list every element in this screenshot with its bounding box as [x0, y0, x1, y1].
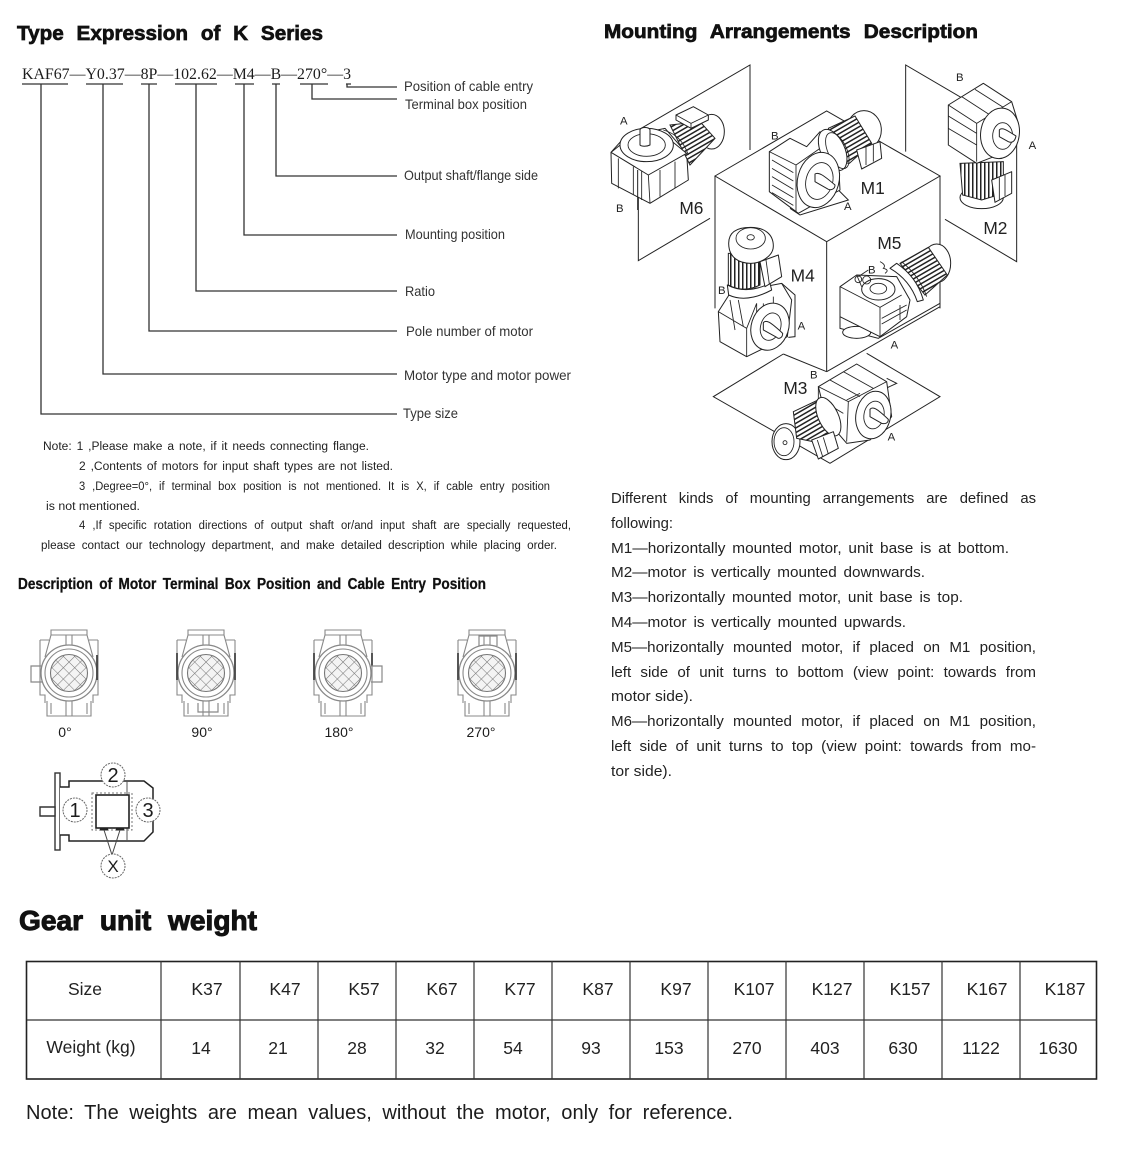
- diagram labels: A: [620, 116, 628, 128]
- table: gear unit weight: [26, 961, 1097, 1079]
- icon: terminal box 180 degrees: [314, 630, 382, 740]
- icon: terminal box 180 degrees: 180°: [325, 724, 353, 740]
- diagram labels: B: [718, 285, 726, 297]
- diagram labels: A: [1029, 140, 1037, 152]
- table weight row: 403: [810, 1038, 840, 1058]
- table header row: K37: [191, 979, 223, 999]
- table header row: K57: [348, 979, 380, 999]
- cable entry position diagram: 2: [107, 765, 119, 787]
- leader labels: Type size: [403, 405, 458, 421]
- mounting arrangements description text: following:: [611, 515, 673, 532]
- table header row: K187: [1045, 979, 1085, 999]
- table weight row: 32: [425, 1038, 445, 1058]
- motor M4: [718, 227, 795, 357]
- mounting arrangements description text: [611, 490, 1036, 780]
- cable entry position diagram: [40, 763, 160, 878]
- icon: terminal box 90 degrees: [177, 630, 235, 740]
- mounting arrangements description text: M3—horizontally mounted motor, unit base is top.: [611, 589, 963, 606]
- diagram labels: B: [616, 203, 624, 215]
- motor M3: [772, 364, 897, 460]
- table header row: [68, 979, 1085, 999]
- table weight row: 21: [268, 1038, 288, 1058]
- diagram labels: M2: [983, 218, 1007, 238]
- table header row: K87: [582, 979, 614, 999]
- table weight row: 93: [581, 1038, 601, 1058]
- leader labels: Output shaft/flange side: [404, 167, 538, 183]
- cable entry position diagram: 3: [142, 800, 154, 822]
- footnote: Note: The weights are mean values, without the motor, only for reference.: [26, 1102, 733, 1124]
- icon: terminal box 270 degrees: 270°: [467, 724, 495, 740]
- table header row: K97: [660, 979, 692, 999]
- table weight row: 54: [503, 1038, 523, 1058]
- notes text block: 4 ,If specific rotation directions of output shaft or/and input shaft are specially requested,: [79, 520, 571, 532]
- notes text block: is not mentioned.: [46, 501, 140, 513]
- table weight row: 630: [888, 1038, 918, 1058]
- motor M6: [611, 107, 724, 210]
- diagram labels: M3: [783, 378, 807, 398]
- type designation code: KAF67—Y0.37—8P—102.62—M4—B—270°—3: [22, 66, 351, 83]
- table header row: K77: [504, 979, 536, 999]
- notes text block: Note: 1 ,Please make a note, if it needs connecting flange.: [43, 441, 369, 453]
- icon: terminal box 0 degrees: [31, 630, 98, 740]
- table weight row: [46, 1037, 1078, 1058]
- diagram labels: B: [771, 130, 779, 142]
- diagram labels: M5: [877, 233, 901, 253]
- notes text block: please contact our technology department, and make detailed description while placing order.: [41, 540, 557, 552]
- leader labels: Motor type and motor power: [404, 367, 571, 383]
- mounting arrangements description text: tor side).: [611, 763, 672, 780]
- icon: terminal box 90 degrees: 90°: [191, 724, 213, 740]
- mounting arrangements description text: motor side).: [611, 688, 693, 705]
- heading: Mounting Arrangements Description: Mounting Arrangements Description: [604, 21, 978, 43]
- diagram labels: [616, 72, 1037, 444]
- mounting arrangements description text: Different kinds of mounting arrangements are defined as: [611, 490, 1036, 507]
- cable entry position diagram: 1: [69, 800, 81, 822]
- diagram labels: A: [798, 320, 806, 332]
- heading: Gear unit weight: Gear unit weight: [19, 905, 257, 936]
- table weight row: 1630: [1039, 1038, 1078, 1058]
- table weight row: Weight (kg): [46, 1037, 136, 1057]
- mounting arrangements description text: M2—motor is vertically mounted downwards.: [611, 564, 925, 581]
- diagram labels: M6: [679, 198, 703, 218]
- cube frame and mounting planes: [638, 65, 1017, 463]
- diagram labels: M4: [791, 266, 815, 286]
- diagram labels: B: [868, 264, 876, 276]
- notes text block: [41, 441, 571, 552]
- leader lines: [41, 84, 397, 414]
- notes text block: 2 ,Contents of motors for input shaft types are not listed.: [79, 461, 393, 473]
- heading: terminal box position: Description of Motor Terminal Box Position and Cable Entry Position: [18, 576, 486, 593]
- diagram labels: A: [844, 201, 852, 213]
- table header row: K167: [967, 979, 1007, 999]
- diagram labels: B: [810, 369, 818, 381]
- mounting arrangements description text: left side of unit turns to top (view point: towards from mo-: [611, 738, 1036, 755]
- motor M1: [769, 111, 882, 215]
- icon: terminal box 0 degrees: 0°: [58, 724, 72, 740]
- table header row: K67: [426, 979, 458, 999]
- table weight row: 153: [654, 1038, 684, 1058]
- diagram labels: M1: [861, 178, 885, 198]
- leader labels: Terminal box position: [405, 96, 527, 112]
- table header row: K107: [734, 979, 774, 999]
- diagram labels: A: [888, 432, 896, 444]
- mounting arrangements description text: M6—horizontally mounted motor, if placed on M1 position,: [611, 713, 1036, 730]
- leader labels: [403, 78, 571, 421]
- diagram labels: A: [891, 339, 899, 351]
- mounting arrangements description text: M5—horizontally mounted motor, if placed on M1 position,: [611, 639, 1036, 656]
- mounting arrangements description text: M4—motor is vertically mounted upwards.: [611, 614, 906, 631]
- leader labels: Mounting position: [405, 226, 505, 242]
- leader labels: Ratio: [405, 283, 435, 299]
- table header row: K47: [269, 979, 301, 999]
- diagram labels: B: [956, 72, 964, 84]
- table header row: K157: [890, 979, 930, 999]
- mounting arrangements cube diagram: [611, 65, 1037, 463]
- leader labels: Position of cable entry: [404, 78, 533, 94]
- motor M5: [840, 244, 951, 338]
- icon: terminal box 270 degrees: [458, 630, 516, 740]
- table weight row: 1122: [962, 1038, 1000, 1058]
- table weight row: 14: [191, 1038, 211, 1058]
- cable entry position diagram: X: [107, 857, 119, 876]
- table header row: K127: [812, 979, 852, 999]
- mounting arrangements description text: M1—horizontally mounted motor, unit base is at bottom.: [611, 540, 1009, 557]
- table weight row: 28: [347, 1038, 367, 1058]
- leader labels: Pole number of motor: [406, 323, 533, 339]
- motor M2: [948, 83, 1023, 209]
- mounting arrangements description text: left side of unit turns to bottom (view point: towards from: [611, 664, 1036, 681]
- heading: Type Expression of K Series: Type Expression of K Series: [17, 22, 323, 45]
- notes text block: 3 ,Degree=0°, if terminal box position is not mentioned. It is X, if cable entry position: [79, 481, 550, 493]
- table weight row: 270: [732, 1038, 762, 1058]
- table header row: Size: [68, 979, 102, 999]
